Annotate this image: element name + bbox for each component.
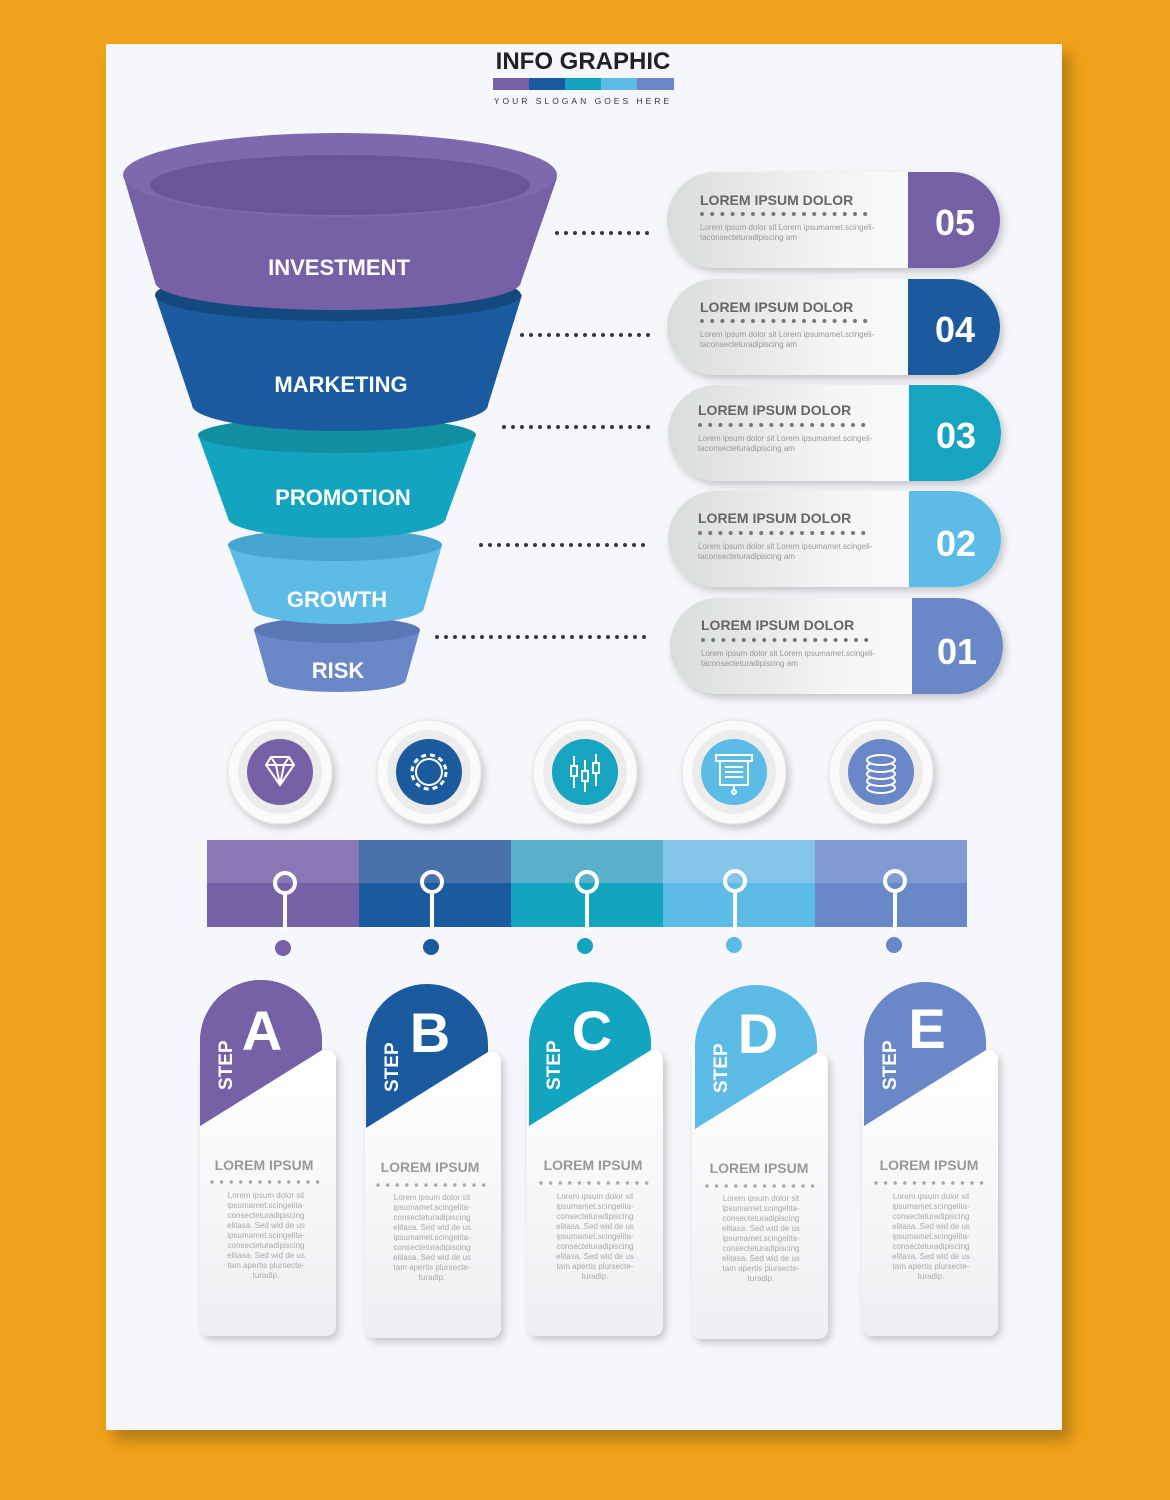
funnel layer: marketing: MARKETING: [274, 372, 408, 397]
step B: Lorem ipsum dolor sit: [394, 1193, 471, 1202]
step A: ipsumamet.scingelita-: [227, 1201, 305, 1210]
pill 02: taconsecteturadipiscing am: [698, 552, 795, 561]
funnel layer: promotion: PROMOTION: [275, 485, 411, 510]
step A: STEP: [216, 1040, 237, 1090]
step E: turadip.: [918, 1272, 944, 1281]
step C: elitasa. Sed wid de us: [556, 1252, 634, 1261]
step E: elitasa. Sed wid de us: [892, 1252, 970, 1261]
step A: tam apertis plursecte-: [228, 1261, 305, 1270]
funnel layer: promotion: [198, 417, 476, 538]
pill 02: LOREM IPSUM DOLOR: [698, 510, 851, 526]
pill 01: taconsecteturadipiscing am: [701, 659, 798, 668]
step C: turadip.: [582, 1272, 608, 1281]
step C: C: [572, 999, 612, 1062]
step B: ipsumamet.scingelita-: [393, 1233, 471, 1242]
step A: elitasa. Sed wid de us: [227, 1251, 305, 1260]
step C: ipsumamet.scingelita-: [556, 1232, 634, 1241]
step B: [365, 984, 501, 1338]
pill 05: Lorem ipsum dolor sit Lorem ipsumamet.scingeli-: [700, 223, 875, 232]
step D: elitasa. Sed wid de us: [722, 1254, 800, 1263]
step E: Lorem ipsum dolor sit: [893, 1192, 970, 1201]
step C: LOREM IPSUM: [544, 1157, 642, 1173]
color bar with pins: [207, 840, 967, 956]
pill 05: LOREM IPSUM DOLOR: [700, 192, 853, 208]
icon: diamond: [228, 720, 332, 824]
step D: elitasa. Sed wid de us: [722, 1224, 800, 1233]
icon: sliders: [533, 720, 637, 824]
icon row: [228, 720, 933, 824]
step A: ipsumamet.scingelita-: [227, 1231, 305, 1240]
step C: elitasa. Sed wid de us: [556, 1222, 634, 1231]
icon: gear: [377, 720, 481, 824]
step A: A: [242, 999, 282, 1062]
step E: LOREM IPSUM: [880, 1157, 978, 1173]
step D: LOREM IPSUM: [710, 1160, 808, 1176]
icon: presentation: [682, 720, 786, 824]
pill 05: taconsecteturadipiscing am: [700, 233, 797, 242]
step B: turadip.: [419, 1273, 445, 1282]
step D: STEP: [711, 1043, 732, 1093]
pill 01: LOREM IPSUM DOLOR: [701, 617, 854, 633]
step cards: [200, 980, 998, 1339]
step E: consecteturadipiscing: [893, 1212, 969, 1221]
step E: [862, 982, 998, 1336]
step C: [527, 982, 663, 1336]
pill 04: Lorem ipsum dolor sit Lorem ipsumamet.scingeli-: [700, 330, 875, 339]
step D: consecteturadipiscing: [723, 1214, 799, 1223]
pill 03: 03: [936, 415, 976, 456]
step B: tam apertis plursecte-: [394, 1263, 471, 1272]
step D: [692, 985, 828, 1339]
step B: consecteturadipiscing: [394, 1243, 470, 1252]
step B: elitasa. Sed wid de us: [393, 1253, 471, 1262]
pill 03: [668, 385, 1001, 481]
step E: tam apertis plursecte-: [893, 1262, 970, 1271]
funnel layer: investment: [123, 133, 557, 310]
step D: D: [738, 1002, 778, 1065]
step E: ipsumamet.scingelita-: [892, 1202, 970, 1211]
icon: coins: [829, 720, 933, 824]
step C: tam apertis plursecte-: [557, 1262, 634, 1271]
step A: [200, 980, 336, 1336]
dotted connectors: [437, 233, 655, 637]
step C: consecteturadipiscing: [557, 1212, 633, 1221]
pill 02: [668, 491, 1001, 587]
step A: elitasa. Sed wid de us: [227, 1221, 305, 1230]
funnel layer: risk: [254, 617, 420, 692]
pill 05: 05: [935, 202, 975, 243]
pill 01: [670, 598, 1003, 694]
step E: consecteturadipiscing: [893, 1242, 969, 1251]
pill 03: Lorem ipsum dolor sit Lorem ipsumamet.scingeli-: [698, 434, 873, 443]
step B: B: [410, 1001, 450, 1064]
step C: Lorem ipsum dolor sit: [557, 1192, 634, 1201]
funnel layer: growth: [228, 529, 442, 624]
step A: consecteturadipiscing: [228, 1241, 304, 1250]
funnel: [123, 133, 557, 692]
pill 01: Lorem ipsum dolor sit Lorem ipsumamet.scingeli-: [701, 649, 876, 658]
page panel: [106, 44, 1062, 1430]
step E: STEP: [880, 1040, 901, 1090]
step E: elitasa. Sed wid de us: [892, 1222, 970, 1231]
step D: turadip.: [748, 1274, 774, 1283]
pill 05: [667, 172, 1000, 268]
pill 04: LOREM IPSUM DOLOR: [700, 299, 853, 315]
step B: ipsumamet.scingelita-: [393, 1203, 471, 1212]
pill 03: LOREM IPSUM DOLOR: [698, 402, 851, 418]
step D: tam apertis plursecte-: [723, 1264, 800, 1273]
pill 04: 04: [935, 309, 975, 350]
step D: Lorem ipsum dolor sit: [723, 1194, 800, 1203]
step D: consecteturadipiscing: [723, 1244, 799, 1253]
pill 04: [667, 279, 1000, 375]
step C: STEP: [544, 1040, 565, 1090]
funnel layer: marketing: [155, 269, 522, 431]
pill 03: taconsecteturadipiscing am: [698, 444, 795, 453]
funnel layer: risk: RISK: [312, 658, 364, 683]
step D: ipsumamet.scingelita-: [722, 1204, 800, 1213]
funnel layer: growth: GROWTH: [287, 587, 387, 612]
pill 04: taconsecteturadipiscing am: [700, 340, 797, 349]
step C: consecteturadipiscing: [557, 1242, 633, 1251]
funnel layer: investment: INVESTMENT: [268, 255, 410, 280]
step A: consecteturadipiscing: [228, 1211, 304, 1220]
step B: consecteturadipiscing: [394, 1213, 470, 1222]
step B: LOREM IPSUM: [381, 1159, 479, 1175]
pill 02: Lorem ipsum dolor sit Lorem ipsumamet.scingeli-: [698, 542, 873, 551]
step A: turadip.: [253, 1271, 279, 1280]
pill 02: 02: [936, 523, 976, 564]
step B: elitasa. Sed wid de us: [393, 1223, 471, 1232]
pill 01: 01: [937, 631, 977, 672]
step A: LOREM IPSUM: [215, 1157, 313, 1173]
step B: STEP: [382, 1042, 403, 1092]
step E: E: [908, 997, 946, 1060]
title: INFO GRAPHIC: [496, 48, 670, 75]
title: [493, 48, 674, 106]
title: YOUR SLOGAN GOES HERE: [494, 96, 672, 106]
step A: Lorem ipsum dolor sit: [228, 1191, 305, 1200]
step D: ipsumamet.scingelita-: [722, 1234, 800, 1243]
step C: ipsumamet.scingelita-: [556, 1202, 634, 1211]
step E: ipsumamet.scingelita-: [892, 1232, 970, 1241]
